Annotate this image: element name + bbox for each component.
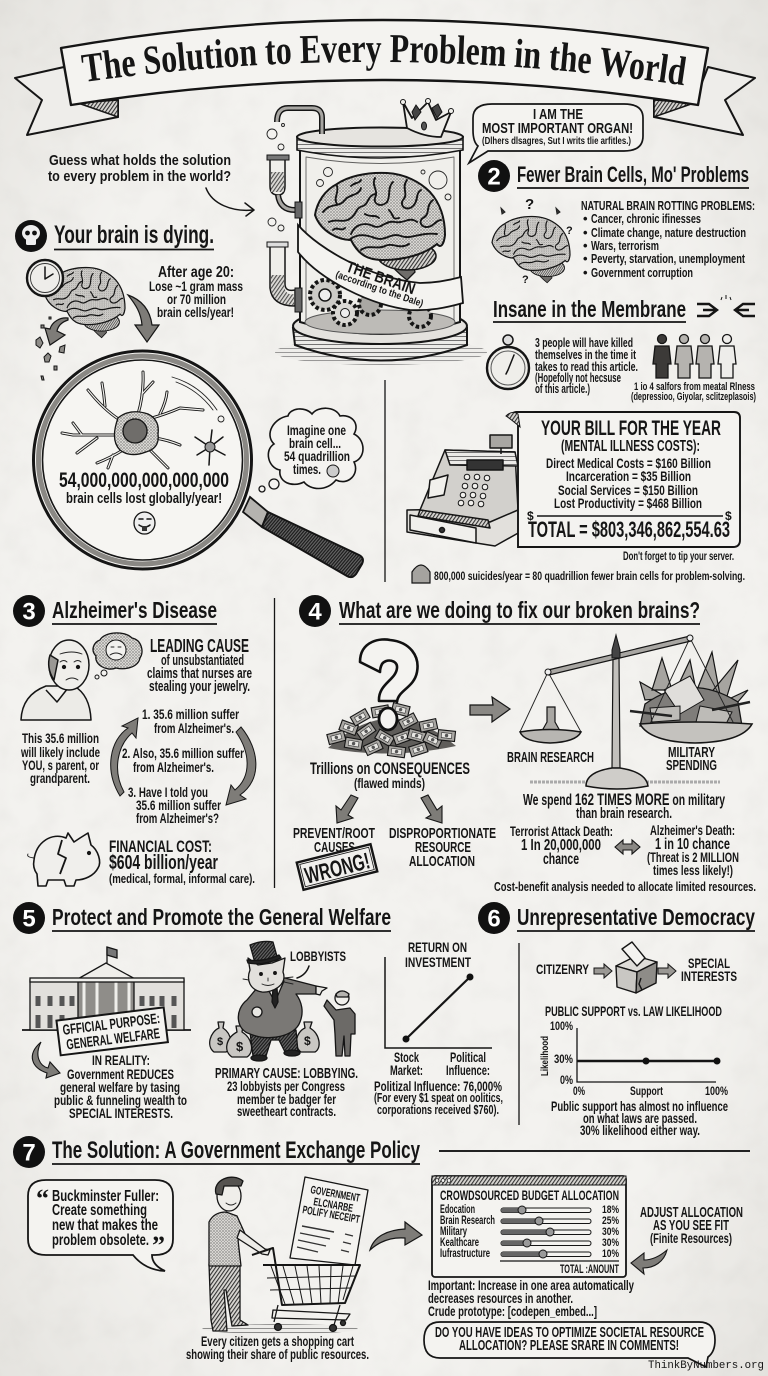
who this includes text: YOU, s parent, or <box>22 758 100 773</box>
row: infrastructure <box>440 1248 619 1260</box>
top pipe <box>277 108 322 134</box>
row: healthcare: Kealthcare <box>440 1237 479 1249</box>
panel: crowdsourced budget <box>432 1176 626 1277</box>
list of problems: • <box>583 238 588 253</box>
speech bubble: most important organ <box>469 104 643 163</box>
chart: return on investment: Influence: <box>446 1062 490 1078</box>
who this includes text <box>20 731 100 786</box>
cart <box>252 1248 360 1305</box>
chart: return on investment: Market: <box>390 1062 423 1078</box>
leading cause text: claims that nurses are <box>147 666 252 682</box>
heading <box>13 902 391 934</box>
speech bubble: most important organ: MOST IMPORTANT ORGAN! <box>482 120 633 137</box>
sign: official purpose: GFFICIAL PURPOSE: <box>62 1011 161 1039</box>
list of problems: • <box>583 211 588 226</box>
quote bubble: new that makes the <box>52 1217 158 1234</box>
comment bubble <box>424 1322 715 1367</box>
financial cost text: FINANCIAL COST: <box>109 837 212 856</box>
list of problems: Wars, terrorism <box>591 238 659 253</box>
scale labels: BRAIN RESEARCH <box>507 749 594 766</box>
top hat <box>250 941 278 963</box>
receipt: your bill: $ <box>527 509 534 523</box>
suicide stat text: of this article.) <box>535 382 590 396</box>
lobbying text: 23 lobbyists per Congress <box>227 1078 345 1094</box>
chart: public support vs likelihood: 0% <box>573 1084 585 1098</box>
pole and base <box>612 655 620 768</box>
heading: 6 <box>487 906 501 932</box>
repeated claims text: from Alzheimer's. <box>133 759 214 775</box>
icon: emoji <box>134 512 155 534</box>
terrorist attack odds <box>510 824 613 868</box>
list of problems: Government corruption <box>591 265 693 280</box>
adjust allocation text: AS YOU SEE FIT <box>653 1217 729 1234</box>
spending comparison: We spend 162 TIMES MORE on military <box>523 790 725 809</box>
icon: question mark <box>360 639 418 730</box>
suicide stat text <box>535 336 638 396</box>
credit: ThinkByNumbers.org <box>648 1360 764 1372</box>
row: infrastructure: 10% <box>602 1248 619 1260</box>
important note <box>428 1277 634 1319</box>
chart: return on investment: Stock <box>394 1049 419 1065</box>
intro question <box>48 152 254 216</box>
icon: money pile <box>327 703 456 758</box>
arrow to scale <box>470 697 510 722</box>
thought cloud: sad face <box>93 633 142 679</box>
illustration: citizen with shopping cart: ELCNARBE <box>312 1196 354 1215</box>
political influence text: corporations received $760). <box>377 1102 499 1117</box>
jar bubbles <box>316 168 451 200</box>
panel: crowdsourced budget: TOTAL :ANOUNT <box>560 1264 619 1276</box>
who this includes text: This 35.6 million <box>22 731 99 746</box>
icon: broken chain <box>697 295 755 316</box>
row: brain research <box>440 1215 619 1227</box>
list of problems <box>581 198 755 280</box>
thought cloud: brain cell... <box>289 435 341 451</box>
arrow: crumbling cells <box>45 318 68 345</box>
age 20 text: After age 20: <box>158 264 234 281</box>
suicide stat text: takes to read this article. <box>535 360 638 374</box>
financial cost text: $604 billion/year <box>109 852 218 874</box>
chart: public support vs likelihood: 100% <box>550 1019 573 1033</box>
speech bubble: most important organ: (Dlhers dlsagres, Sut I writs tlie arfitles.) <box>482 136 631 147</box>
divider <box>384 380 386 582</box>
consequences text <box>310 759 470 791</box>
in reality text: SPECIAL INTERESTS. <box>69 1105 173 1121</box>
divider <box>518 943 520 1125</box>
intro question: Guess what holds the solution <box>49 152 231 169</box>
heading <box>13 595 217 627</box>
brain crumbs <box>36 317 65 380</box>
beam <box>548 636 691 675</box>
magnifying glass: 54,000,000,000,000,000 <box>59 469 229 492</box>
divider <box>274 598 276 888</box>
receipt: your bill: Lost Productivity = $468 Billion <box>554 495 702 511</box>
in reality text: IN REALITY: <box>92 1052 150 1068</box>
alzheimer's odds: 1 in 10 chance <box>655 836 730 853</box>
suit <box>238 978 316 1038</box>
illustration: fat cat lobbyist: $ <box>304 1034 311 1048</box>
icon: stopwatch <box>487 335 529 389</box>
quote bubble: Create something <box>52 1202 147 1219</box>
leading cause text <box>147 636 252 695</box>
illustration: balance scale <box>520 635 752 789</box>
repeated claims text: 1. 35.6 million suffer <box>142 706 239 722</box>
in reality text: general welfare by tasing <box>60 1079 180 1095</box>
disproportionate resource allocation <box>389 825 496 870</box>
row: healthcare: 30% <box>602 1237 619 1249</box>
icon: broken piggy bank <box>28 833 100 886</box>
icon: rotting brain: ? <box>566 225 573 237</box>
lens <box>34 351 252 569</box>
title banner <box>14 18 756 136</box>
leading cause text: LEADING CAUSE <box>150 636 249 656</box>
banner right tail <box>654 67 755 135</box>
leading cause text: of unsubstantiated <box>161 653 244 669</box>
terrorist attack odds: Terrorist Attack Death: <box>510 824 613 839</box>
section 1: your brain is dying <box>15 220 363 577</box>
heading: 5 <box>22 906 36 932</box>
cart caption <box>186 1333 369 1362</box>
heading <box>13 1136 420 1168</box>
icon: clock and shrinking brain <box>27 260 125 338</box>
alzheimer's odds: Alzheimer's Death: <box>650 823 735 838</box>
important note: Important: Increase in one area automatically <box>428 1277 634 1293</box>
flask <box>538 707 564 738</box>
lobbying text: sweetheart contracts. <box>237 1103 336 1119</box>
banner folds <box>78 100 694 117</box>
military pile <box>630 652 750 726</box>
quote bubble: problem obsolete. <box>52 1232 149 1249</box>
suicide stat text: 3 people will have killed <box>535 336 633 350</box>
citizenry flow: SPECIAL <box>688 955 730 971</box>
citizenry flow <box>536 942 737 993</box>
row: brain research: Brain Research <box>440 1215 495 1227</box>
receipt <box>290 1177 368 1265</box>
thought cloud: times. <box>293 461 321 477</box>
illustration: old man <box>21 640 91 720</box>
age 20 text <box>149 264 243 320</box>
prevent root causes <box>293 825 375 856</box>
banner main band <box>61 20 708 105</box>
row: education: Edocation <box>440 1204 475 1216</box>
public support text: 30% likelihood either way. <box>580 1122 700 1138</box>
arrow to panel <box>631 1250 667 1274</box>
gears <box>310 280 431 327</box>
neuron <box>62 372 225 468</box>
in reality text: public & funneling wealth to <box>54 1092 187 1108</box>
icon: rotting brain: ? <box>522 274 529 286</box>
small man <box>324 1000 355 1056</box>
lobbying text <box>215 1065 358 1119</box>
stamp: wrong <box>297 844 377 890</box>
section 3: alzheimer's disease <box>13 595 256 886</box>
citizenry flow: INTERESTS <box>681 968 737 984</box>
arrow to budget panel <box>370 1222 422 1250</box>
illustration: fat cat lobbyist <box>210 941 355 1061</box>
legs and shoes <box>250 1030 298 1056</box>
chart: public support vs likelihood: Support <box>630 1084 663 1098</box>
section 6: unrepresentative democracy <box>478 902 755 1138</box>
chart: public support vs likelihood <box>540 1003 728 1098</box>
icon: four people <box>653 334 736 378</box>
test tubes <box>267 124 302 312</box>
heading: 7 <box>22 1140 36 1166</box>
person legs <box>209 1264 248 1331</box>
heading <box>478 160 749 192</box>
chart: public support vs likelihood: Likelihood <box>540 1036 551 1076</box>
illustration: fat cat lobbyist: $ <box>217 1036 223 1048</box>
jar shadow <box>275 339 487 365</box>
age 20 text: Lose ~1 gram mass <box>149 278 243 294</box>
in reality text <box>54 1052 187 1121</box>
prevent root causes: PREVENT/ROOT <box>293 825 375 842</box>
circular arrows <box>111 718 256 805</box>
heading: Alzheimer's Disease <box>52 597 217 623</box>
important note: Crude prototype: [codepen_embed...] <box>428 1303 597 1319</box>
speech bubble: most important organ: I AM THE <box>533 106 583 123</box>
heading: 3 <box>22 598 36 626</box>
icon: rotting brain: ? <box>525 196 534 213</box>
banner left tail <box>15 67 118 135</box>
section 5: general welfare <box>13 902 503 1121</box>
thought cloud: 54 quadrillion <box>284 448 350 464</box>
lobbyists label: LOBBYISTS <box>290 948 346 964</box>
repeated claims text: 2. Also, 35.6 million suffer <box>122 745 244 761</box>
age 20 text: or 70 million <box>167 291 226 307</box>
scale labels: MILITARY <box>668 744 715 761</box>
tombstone note <box>412 565 745 583</box>
icon: ballot box <box>616 942 657 993</box>
list of problems: • <box>583 265 588 280</box>
heading: 4 <box>308 598 322 626</box>
ribbon label <box>298 225 463 310</box>
financial cost text: (medical, formal, informal care). <box>109 871 255 886</box>
adjust allocation text <box>640 1204 743 1246</box>
political influence text: (For every $1 speat on oolitics, <box>374 1090 503 1105</box>
citizenry flow: CITIZENRY <box>536 961 589 977</box>
jar lid <box>297 137 463 158</box>
money bags <box>210 1022 319 1057</box>
public support text <box>551 1098 728 1138</box>
repeated claims text: 35.6 million suffer <box>136 797 221 813</box>
consequences text: Trillions on CONSEQUENCES <box>310 759 470 778</box>
icon: rotting brain <box>492 196 573 286</box>
brain in jar <box>315 173 445 280</box>
row: military: 30% <box>602 1226 619 1238</box>
cart caption: showing their share of public resources. <box>186 1346 369 1362</box>
thought cloud <box>259 408 363 492</box>
alzheimer's odds: times less likely!) <box>653 862 733 878</box>
magnifying glass: brain cells lost globally/year! <box>66 490 222 507</box>
cart caption: Every citizen gets a shopping cart <box>201 1333 354 1349</box>
section 4: fixing broken brains <box>293 595 756 894</box>
magnifying glass <box>34 351 363 577</box>
heading: The Solution: A Government Exchange Policy <box>52 1137 420 1164</box>
illustration: brain in jar <box>267 98 487 365</box>
chart: public support vs likelihood: 0% <box>560 1073 573 1087</box>
shadow <box>530 780 720 784</box>
row: healthcare <box>440 1237 619 1249</box>
who this includes text: grandparent. <box>30 771 90 786</box>
scale labels: SPENDING <box>666 757 717 774</box>
heading: 2 <box>487 164 501 190</box>
receipt: your bill <box>506 412 740 547</box>
chart: public support vs likelihood: 100% <box>705 1084 728 1098</box>
arrow: in reality <box>32 1042 60 1078</box>
chart: public support vs likelihood: 30% <box>554 1052 573 1066</box>
arrow to jar <box>206 188 254 216</box>
quote bubble: ” <box>152 1231 165 1260</box>
stamp: wrong: WRONG! <box>302 847 372 889</box>
receipt: your bill: Incarceration = $35 Billion <box>566 468 691 484</box>
row: military: Military <box>440 1226 467 1238</box>
disproportionate resource allocation: DISPROPORTIONATE <box>389 825 496 842</box>
receipt: your bill: $ <box>725 509 732 523</box>
illustration: citizen with shopping cart: POLIFY NECEIPT <box>301 1204 361 1226</box>
spending comparison: than brain research. <box>576 805 672 822</box>
mental illness stat <box>631 381 756 403</box>
heading <box>15 220 214 252</box>
heading: Your brain is dying. <box>54 221 214 249</box>
right strings and pan <box>650 638 734 724</box>
crown <box>403 102 451 137</box>
prevent root causes: CAUSES <box>314 839 355 856</box>
handle <box>243 497 268 527</box>
quote bubble: “ <box>36 1184 49 1213</box>
political influence text <box>374 1079 503 1117</box>
receipt: your bill: (MENTAL ILLNESS COSTS): <box>561 438 700 455</box>
heading <box>478 902 755 934</box>
suicide stat text: themselves in the time it <box>535 348 637 362</box>
public support text: on what laws are passed. <box>583 1110 697 1126</box>
row: brain research: 25% <box>602 1215 619 1227</box>
leading cause text: stealing your jewelry. <box>149 679 250 695</box>
section 2: fewer brain cells <box>385 160 756 583</box>
sign: official purpose <box>56 1007 168 1055</box>
disproportionate resource allocation: ALLOCATION <box>409 853 475 870</box>
chart: return on investment: RETURN ON <box>408 939 467 955</box>
person torso <box>209 1212 246 1266</box>
lobbying text: member te badger fer <box>237 1091 336 1107</box>
terrorist attack odds: chance <box>543 851 579 868</box>
heading: Protect and Promote the General Welfare <box>52 904 391 930</box>
intro question: to every problem in the world? <box>48 168 231 185</box>
disproportionate resource allocation: RESOURCE <box>415 839 471 856</box>
lobbyists pointer <box>297 966 309 978</box>
who this includes text: will likely include <box>20 745 100 760</box>
spending comparison <box>523 790 725 822</box>
important note: decreases resources in another. <box>428 1290 573 1306</box>
terrorist attack odds: 1 In 20,000,000 <box>521 837 601 854</box>
repeated claims text: 3. Have I told you <box>128 784 208 800</box>
heading: insane in the membrane: Insane in the Membrane <box>493 296 686 322</box>
icon: cash register <box>407 435 520 546</box>
scale labels <box>507 744 717 774</box>
in reality text: Government REDUCES <box>67 1066 174 1082</box>
suicide stat text: (Hopefolly not hecsuse <box>535 371 621 385</box>
sign: official purpose: GENERAL WELFARE <box>66 1026 161 1053</box>
illustration: brain in jar: THE BRAIN <box>344 259 417 298</box>
alzheimer's odds <box>647 823 739 878</box>
receipt: your bill: Social Services = $150 Billion <box>558 482 698 498</box>
person head <box>217 1181 241 1211</box>
row: education: 18% <box>602 1204 619 1216</box>
row: military <box>440 1226 619 1238</box>
political influence text: Politizal Influence: 76,000% <box>374 1079 502 1094</box>
illustration: fat cat lobbyist: $ <box>236 1039 244 1054</box>
repeated claims text: from Alzheimer's? <box>136 810 219 826</box>
financial cost text <box>109 837 255 886</box>
horizontal rule <box>439 1150 750 1152</box>
lobbying text: PRIMARY CAUSE: LOBBYING. <box>215 1065 358 1082</box>
quote bubble: Buckminster Fuller: <box>52 1188 159 1205</box>
double arrow <box>615 840 640 854</box>
illustration: citizen with shopping cart: GOVERNMENT <box>309 1184 361 1205</box>
chart: return on investment: Political <box>450 1049 486 1065</box>
glass cylinder <box>300 150 460 334</box>
consequences text: (flawed minds) <box>354 775 425 791</box>
section 7: the solution <box>13 1136 750 1367</box>
heading <box>299 595 700 627</box>
arrow: to magnifier <box>128 295 159 342</box>
illustration: capitol building <box>22 947 191 1030</box>
jar pedestal <box>293 328 467 360</box>
list of problems: • <box>583 251 588 266</box>
chart: return on investment: INVESTMENT <box>405 954 471 970</box>
row: education <box>440 1204 619 1216</box>
left strings and pan <box>520 672 581 732</box>
panel: crowdsourced budget: CROWDSOURCED BUDGET ALLOCATION <box>440 1187 619 1203</box>
head <box>248 958 285 992</box>
title text: The Solution to Every Problem in the World <box>80 34 686 86</box>
list of problems: Cancer, chronic ifinesses <box>591 211 701 226</box>
repeated claims text <box>122 706 244 826</box>
list of problems: • <box>583 225 588 240</box>
row: infrastructure: Iufrastructure <box>440 1248 490 1260</box>
thought cloud: Imagine one <box>287 422 346 438</box>
quote bubble <box>28 1180 173 1271</box>
illustration: brain in jar: (according to the Dale) <box>334 269 425 310</box>
age 20 text: brain cells/year! <box>157 304 234 320</box>
arrows: two branches <box>336 795 442 823</box>
chart: return on investment <box>385 939 492 1078</box>
illustration: citizen with shopping cart <box>202 1177 368 1334</box>
repeated claims text: from Alzheimer's. <box>154 720 234 736</box>
